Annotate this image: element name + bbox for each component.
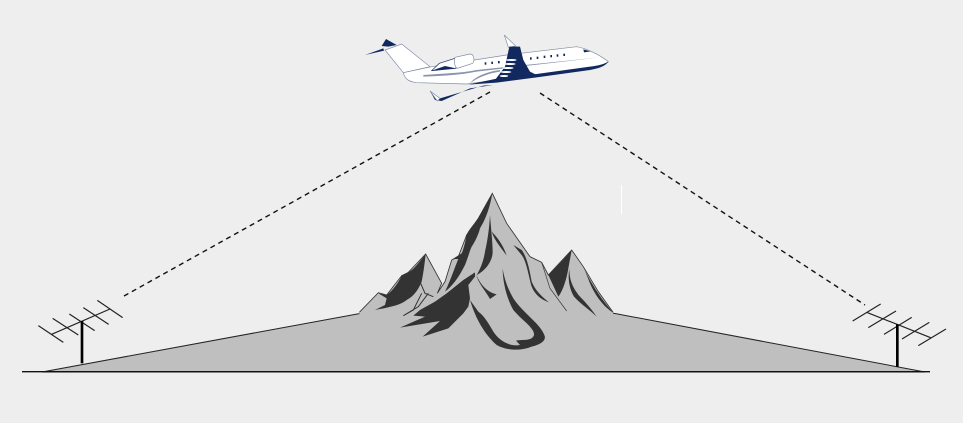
white tick [621, 185, 622, 214]
mountain [359, 193, 613, 352]
left antenna [38, 300, 123, 363]
aircraft [365, 35, 609, 101]
right antenna [853, 304, 946, 367]
signal path left [124, 92, 490, 296]
ground slope [42, 314, 925, 372]
ground line [22, 371, 930, 373]
signal path right [540, 93, 865, 305]
